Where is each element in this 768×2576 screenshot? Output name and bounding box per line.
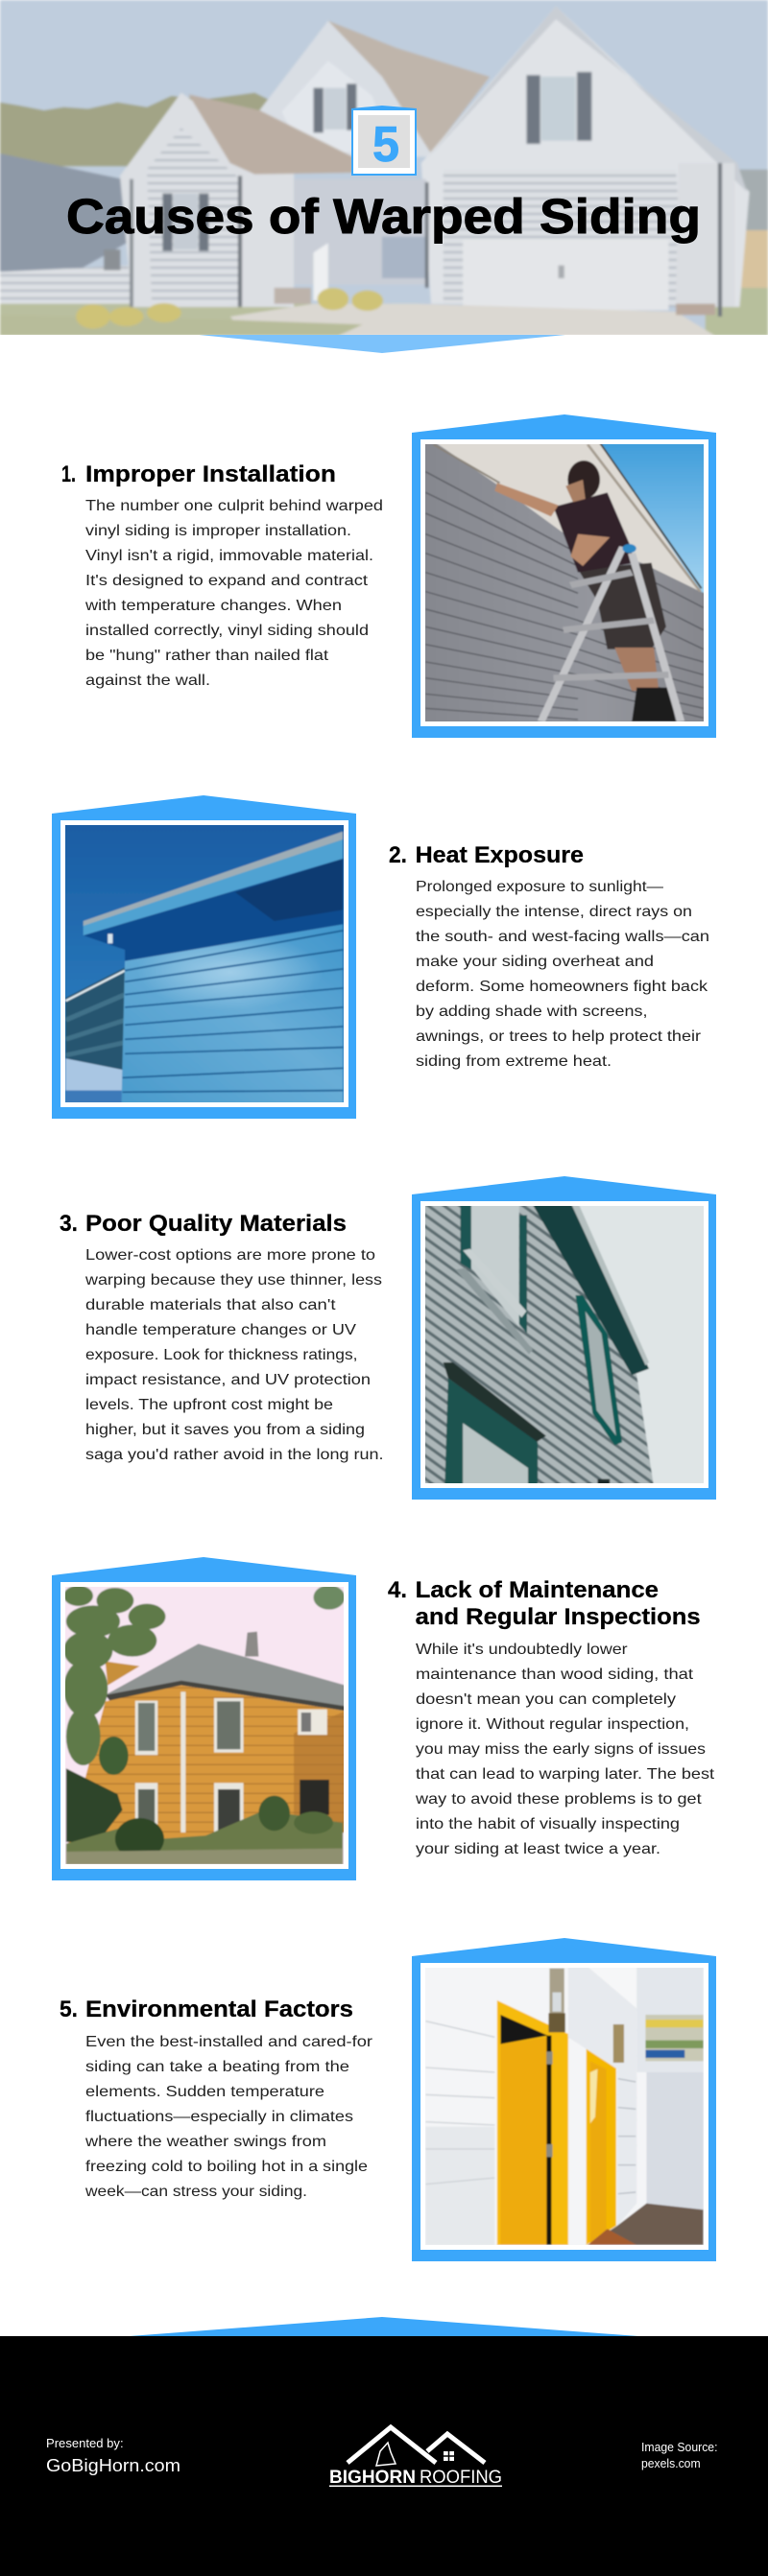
heading: improper installation: 1. [61,461,76,487]
header banner: faded house photo [0,0,768,336]
text block: cause 5: elements. Sudden temperature [85,2084,324,2100]
text block: cause 3: Lower-cost options are more prone to [85,1247,375,1264]
text block: cause 1 [84,498,383,689]
footer panel [0,2336,768,2576]
house frame 2 [52,795,356,1119]
text block: cause 4: way to avoid these problems is to get [415,1791,702,1808]
presented by: GoBigHorn.com [46,2456,180,2475]
logo: bighorn roofing [329,2427,502,2488]
text block: cause 5: siding can take a beating from the [85,2059,349,2075]
heading: lack of maintenance and regular inspections: and Regular Inspections [416,1604,701,1630]
panel: cause 2 [52,795,709,1119]
house frame 5 [412,1938,716,2261]
heading: poor quality materials: 3. [60,1211,78,1237]
text block: cause 2: by adding shade with screens, [416,1004,647,1020]
text block: cause 2: siding from extreme heat. [416,1053,612,1070]
text block: cause 5: Even the best-installed and cared-for [85,2034,373,2050]
text block: cause 3: warping because they use thinner, less [84,1272,382,1288]
text block: cause 4: maintenance than wood siding, that [416,1666,694,1683]
panel: cause 4 [52,1557,715,1880]
text block: cause 1: installed correctly, vinyl siding should [85,623,369,639]
photo: blue siding wall against blue sky [61,822,350,1106]
house frame 1 [412,414,716,738]
text block: cause 1: It's designed to expand and contract [85,573,369,589]
text block: cause 4: your siding at least twice a year. [416,1841,660,1857]
text block: cause 1: vinyl siding is improper installation. [85,523,351,539]
text block: cause 2 [416,879,709,1070]
text block: cause 2: the south- and west-facing walls—can [416,929,709,945]
text block: cause 4: While it's undoubtedly lower [416,1642,628,1658]
logo: bighorn roofing: BIGHORN [329,2468,416,2488]
photo: orange house with grey roof and foliage [61,1583,350,1868]
text block: cause 4 [415,1642,715,1857]
badge: number 5 [351,106,417,176]
text block: cause 2: especially the intense, direct rays on [416,904,692,920]
panel: cause 5 [60,1938,716,2261]
text block: cause 3: levels. The upfront cost might be [85,1397,333,1413]
image source [641,2440,718,2470]
text block: cause 3: impact resistance, and UV protection [85,1372,371,1388]
text block: cause 5 [84,2034,373,2200]
text block: cause 3: higher, but it saves you from a siding [85,1422,365,1438]
logo: bighorn roofing: ROOFING [420,2468,502,2488]
heading: environmental factors: Environmental Factors [85,1997,353,2022]
house frame 4 [52,1557,356,1880]
heading: heat exposure: Heat Exposure [416,842,584,868]
text block: cause 3 [84,1247,383,1463]
panel: cause 3 [60,1176,716,1500]
image source: pexels.com [641,2456,701,2470]
text block: cause 1: against the wall. [85,673,210,689]
presented by [46,2436,180,2475]
photo: man installing siding on ladder [421,441,710,726]
photo: grey clapboard wall with green trim [421,1202,710,1487]
house frame 3 [412,1176,716,1500]
text block: cause 2: awnings, or trees to help protect their [416,1028,702,1045]
text block: cause 1: Vinyl isn't a rigid, immovable material. [85,548,373,564]
heading: lack of maintenance and regular inspections [388,1577,701,1630]
text block: cause 1: be "hung" rather than nailed flat [85,648,329,664]
heading: heat exposure: 2. [389,842,407,868]
footer arrow [130,2317,638,2336]
heading: improper installation: Improper Installation [85,461,336,487]
presented by: Presented by: [46,2436,124,2450]
heading: lack of maintenance and regular inspections: 4. [388,1577,407,1603]
text block: cause 4: you may miss the early signs of issues [416,1741,706,1758]
text block: cause 4: ignore it. Without regular inspection, [416,1716,689,1733]
heading: poor quality materials: Poor Quality Materials [85,1211,347,1237]
header arrow below banner [199,335,565,353]
text block: cause 4: into the habit of visually inspecting [416,1816,680,1832]
text block: cause 2: Prolonged exposure to sunlight— [416,879,663,895]
text block: cause 2: deform. Some homeowners fight back [416,979,708,995]
text block: cause 3: handle temperature changes or UV [85,1322,356,1338]
text block: cause 1: with temperature changes. When [84,598,342,614]
text block: cause 5: where the weather swings from [84,2134,326,2150]
photo: white siding with yellow doors [421,1965,710,2248]
title: Causes of Warped Siding [66,189,701,244]
text block: cause 5: week—can stress your siding. [84,2184,307,2200]
heading: lack of maintenance and regular inspections: Lack of Maintenance [416,1577,659,1603]
text block: cause 3: saga you'd rather avoid in the long run. [85,1447,384,1463]
text block: cause 4: doesn't mean you can completely [416,1691,676,1708]
panel: cause 1 [61,414,716,738]
image source: Image Source: [641,2440,718,2454]
text block: cause 5: freezing cold to boiling hot in a single [85,2159,368,2175]
heading: environmental factors: 5. [60,1997,78,2022]
text block: cause 5: fluctuations—especially in climates [85,2109,353,2125]
text block: cause 3: durable materials that also can't [85,1297,336,1313]
text block: cause 2: make your siding overheat and [416,954,654,970]
text block: cause 4: that can lead to warping later. The best [416,1766,715,1783]
text block: cause 3: exposure. Look for thickness ratings, [85,1347,357,1363]
text block: cause 1: The number one culprit behind warped [85,498,383,514]
badge: number 5: 5 [372,117,399,173]
